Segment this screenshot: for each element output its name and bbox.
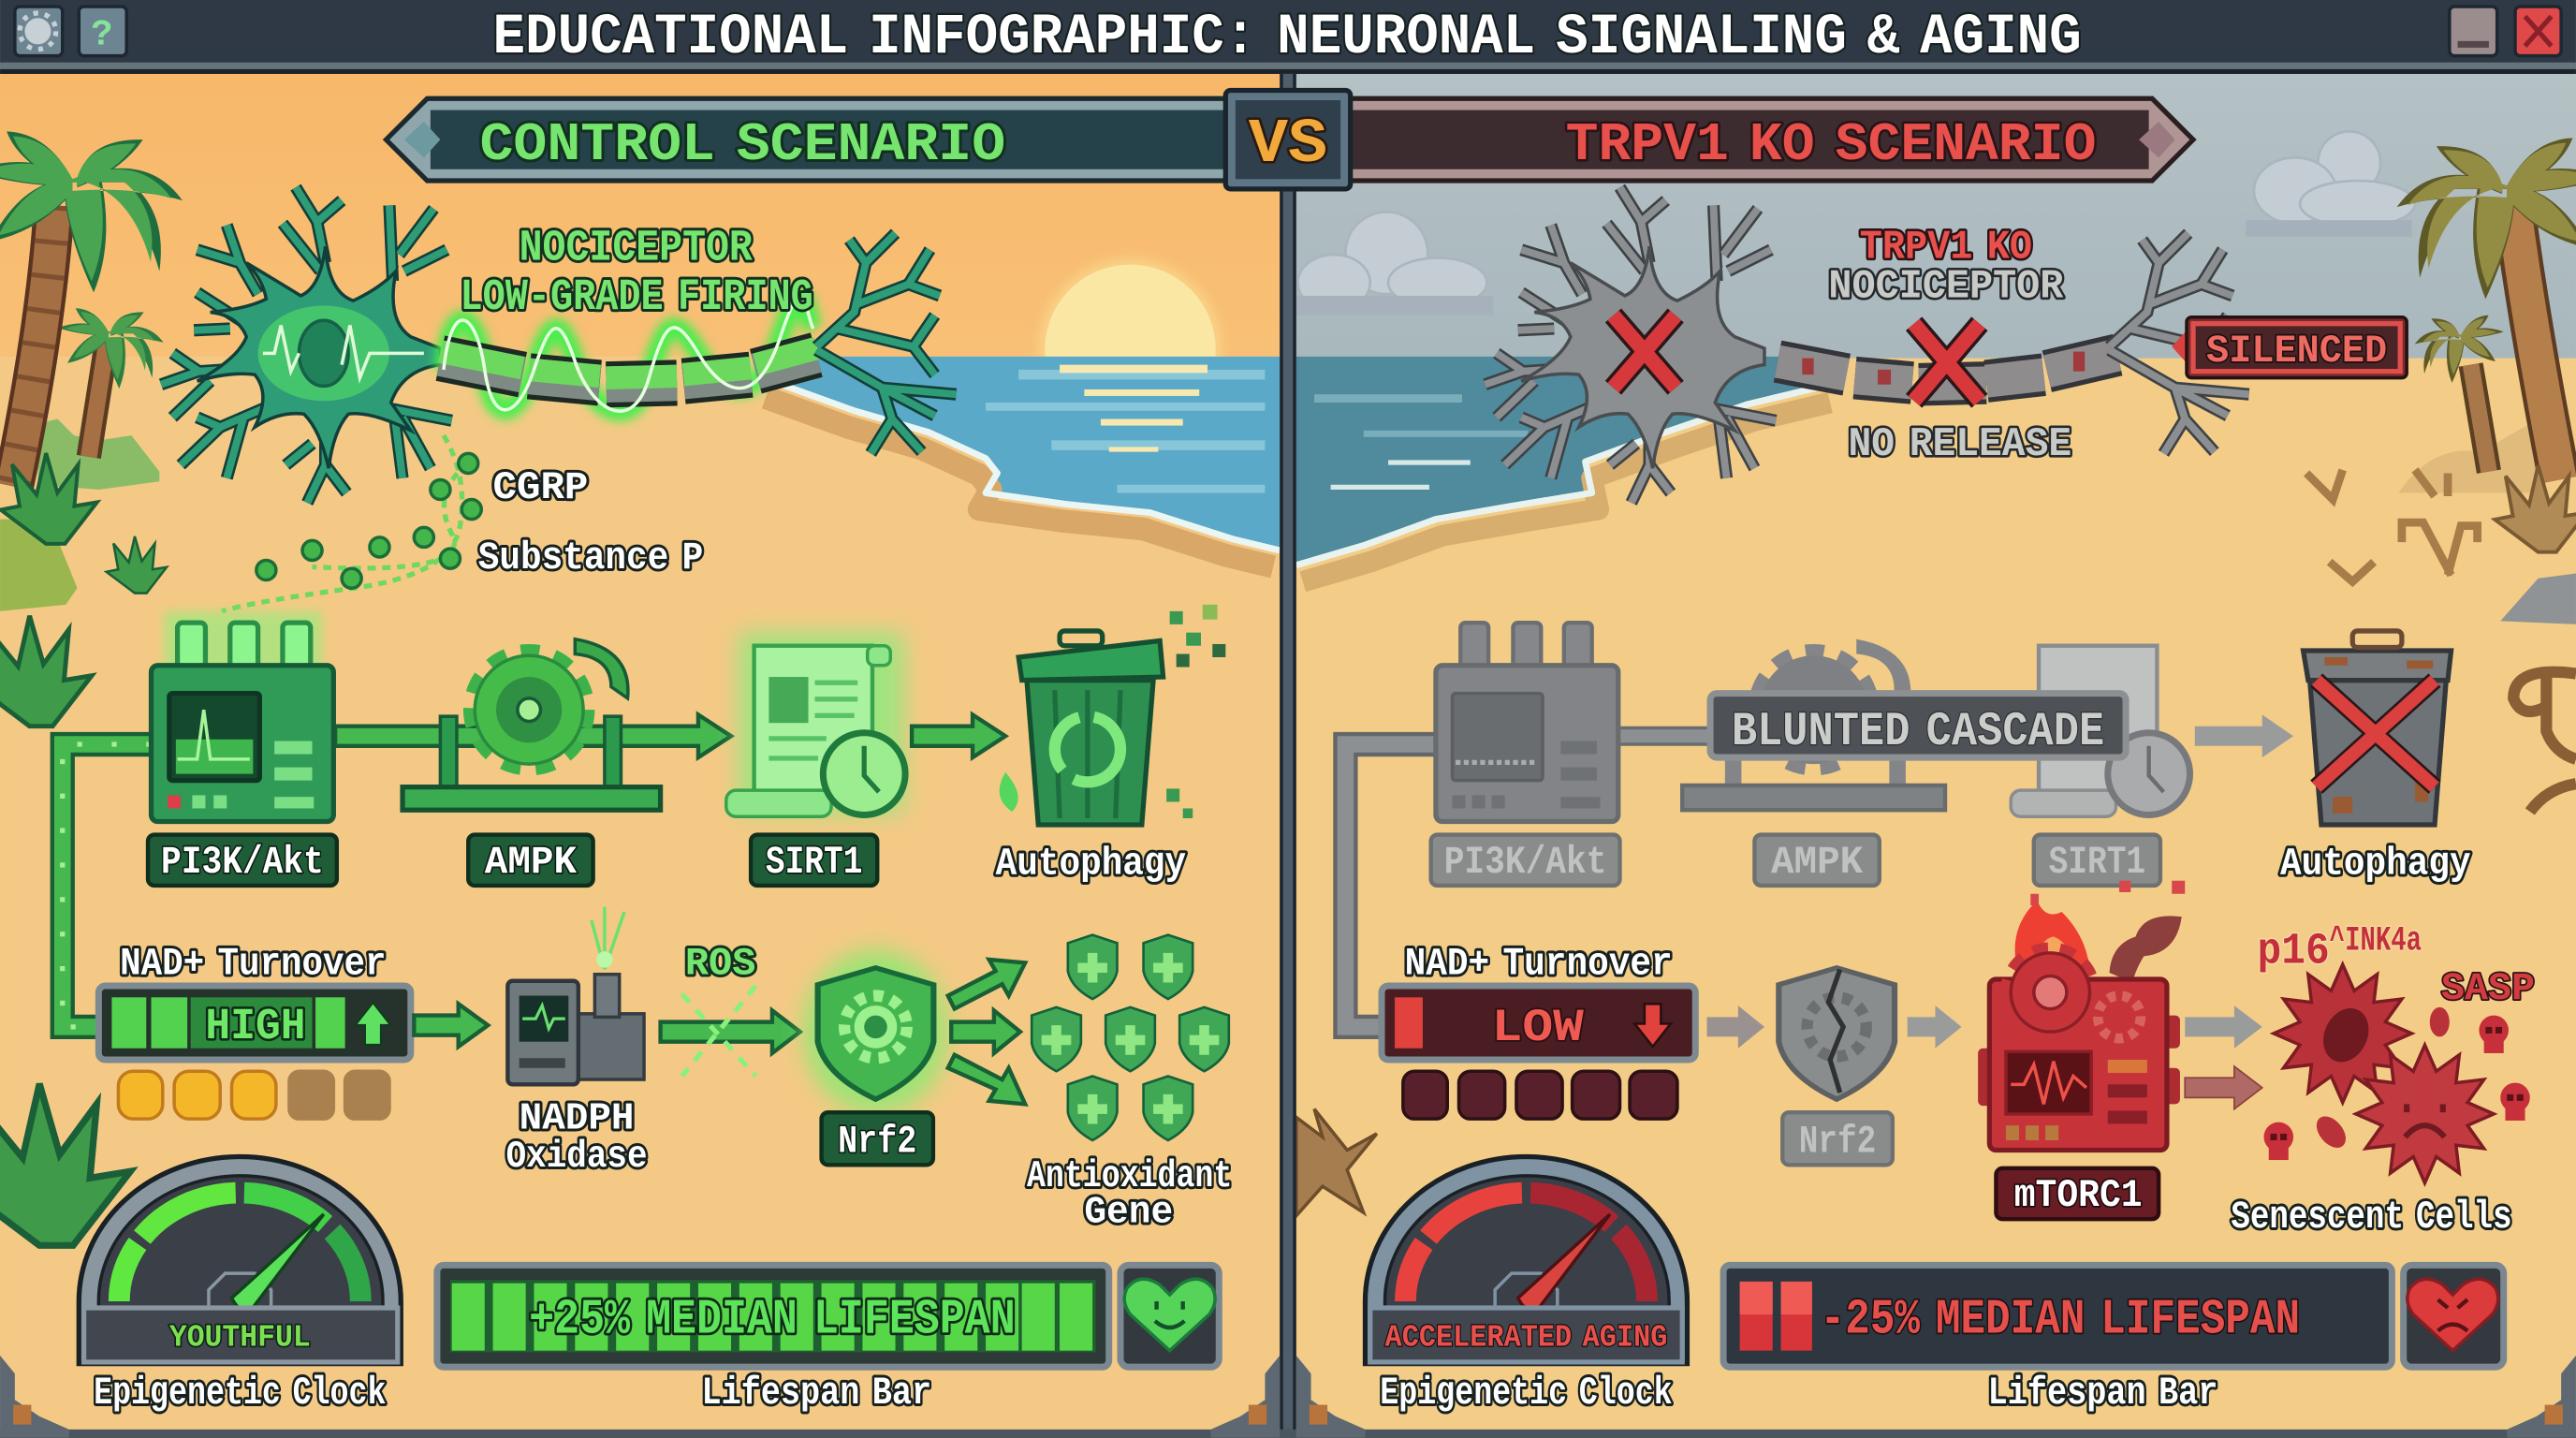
label: NAD+ turnover KO: NAD+ Turnover xyxy=(1405,942,1673,987)
VS badge: VS xyxy=(1249,110,1327,181)
label: senescent cells: Senescent Cells xyxy=(2231,1195,2511,1240)
arrow: NAD+ to Nrf2 blunted xyxy=(1707,1005,1764,1049)
icons: senescent cells and skulls xyxy=(2263,964,2530,1183)
label: mTORC1: mTORC1 xyxy=(2014,1173,2143,1218)
arrow: ROS to Nrf2 xyxy=(661,986,800,1077)
heading banner: control scenario xyxy=(386,98,1229,181)
arrows: mTORC1 to senescent cells xyxy=(2185,1005,2262,1109)
icon: red X on soma xyxy=(1613,315,1676,388)
machine: AMPK greyed xyxy=(1682,639,1945,810)
palm trees and plants: control side xyxy=(0,131,183,1245)
coins: high NAD+ xyxy=(118,1071,389,1119)
machine: PI3K/Akt xyxy=(152,611,333,822)
label: epigenetic clock KO: Epigenetic Clock xyxy=(1380,1371,1673,1416)
arrows: Nrf2 to antioxidant genes xyxy=(948,960,1025,1104)
label: NAD+ turnover control: NAD+ Turnover xyxy=(120,942,386,987)
axon xyxy=(440,298,816,411)
meter: NAD+ low xyxy=(1382,986,1695,1060)
machine: NADPH oxidase xyxy=(507,907,644,1084)
label: p16 INK4a: ^INK4a xyxy=(2330,921,2422,961)
machine: AMPK gear xyxy=(402,639,661,810)
label: TRPV1 KO nociceptor xyxy=(1828,225,2064,311)
title: EDUCATIONAL INFOGRAPHIC: NEURONAL SIGNALING & AGING xyxy=(493,6,2082,70)
window frame bottom corners xyxy=(0,1356,2576,1438)
label: p16 INK4a xyxy=(2257,921,2422,976)
title bar xyxy=(0,0,2576,74)
coins: low NAD+ xyxy=(1403,1071,1677,1119)
gauge: epigenetic clock youthful xyxy=(79,1157,401,1364)
heading text: TRPV1 KO SCENARIO xyxy=(1566,115,2096,176)
label: antioxidant gene: Gene xyxy=(1084,1192,1173,1235)
banner: blunted cascade: BLUNTED CASCADE xyxy=(1732,706,2104,759)
arrow: PI3K to AMPK to SIRT1 xyxy=(335,714,731,757)
label: SIRT1 greyed: SIRT1 xyxy=(2049,840,2145,885)
heading text: CONTROL SCENARIO xyxy=(480,115,1005,176)
label: AMPK greyed: AMPK xyxy=(1771,840,1864,885)
arrow: NAD+ to NADPH oxidase xyxy=(414,1004,488,1047)
meter: NAD+ high xyxy=(98,986,411,1060)
label: NADPH oxidase: Oxidase xyxy=(506,1136,648,1179)
background: control beach panel xyxy=(0,74,1280,1438)
arrow: SIRT1 to autophagy blunted xyxy=(2195,714,2293,757)
label: nociceptor low-grade firing: NOCICEPTOR xyxy=(520,224,753,273)
control nociceptor neuron xyxy=(161,187,956,503)
icon: minimize button xyxy=(2450,7,2497,56)
label: lifespan bar KO: Lifespan Bar xyxy=(1988,1371,2217,1416)
label: CGRP: CGRP xyxy=(493,465,588,510)
label: antioxidant gene xyxy=(1027,1155,1232,1235)
axon xyxy=(1778,352,2117,385)
icon: healthy heart xyxy=(1120,1265,1219,1367)
arrow: Nrf2 to mTORC1 xyxy=(1908,1005,1962,1049)
label: SIRT1: SIRT1 xyxy=(766,840,862,885)
icon: settings button xyxy=(15,7,63,56)
label: PI3K/Akt: PI3K/Akt xyxy=(161,840,324,885)
label: Nrf2: Nrf2 xyxy=(838,1119,916,1164)
TRPV1 KO silenced neuron xyxy=(1486,187,2249,503)
bar: plus 25 percent lifespan: +25% MEDIAN LIFESPAN xyxy=(529,1291,1016,1347)
machine: SIRT1 scroll and clock xyxy=(726,633,905,816)
label: no release: NO RELEASE xyxy=(1848,421,2071,468)
machine: mTORC1 overheating xyxy=(1978,881,2185,1151)
icon: help button: ? xyxy=(91,14,112,55)
gauge: epigenetic clock youthful: YOUTHFUL xyxy=(169,1320,311,1356)
label: nociceptor low-grade firing: LOW-GRADE FIRING xyxy=(460,273,813,323)
icon: cracked Nrf2 shield xyxy=(1778,968,1895,1099)
label: TRPV1 KO nociceptor: TRPV1 KO xyxy=(1860,225,2032,271)
machine: PI3K/Akt silenced xyxy=(1436,623,1618,822)
label: Autophagy: Autophagy xyxy=(996,842,1186,887)
gauge: epigenetic clock accelerated aging xyxy=(1365,1157,1687,1364)
label: NADPH oxidase: NADPH xyxy=(520,1098,634,1141)
label: Autophagy KO: Autophagy xyxy=(2280,842,2471,887)
cloud: left xyxy=(1296,212,1493,315)
label: p16 INK4a: p16 xyxy=(2257,927,2330,976)
gauge: epigenetic clock accelerated aging: ACCELERATED AGING xyxy=(1385,1320,1667,1356)
label: AMPK xyxy=(468,835,593,886)
central divider xyxy=(1280,74,1296,1438)
label: epigenetic clock: Epigenetic Clock xyxy=(94,1371,386,1416)
label: AMPK greyed xyxy=(1754,835,1880,886)
label: NADPH oxidase xyxy=(506,1098,648,1179)
bar: plus 25 percent lifespan xyxy=(437,1265,1109,1367)
palm trees and dry plants: TRPV1 KO side xyxy=(1296,138,2576,1216)
arrow: blunted line from PI3K xyxy=(1618,727,1717,744)
badge: silenced xyxy=(2172,317,2407,378)
icons: antioxidant gene shields xyxy=(1032,935,1229,1140)
icon: Nrf2 shield xyxy=(803,949,948,1114)
label: lifespan bar: Lifespan Bar xyxy=(701,1371,931,1416)
icon: red X on axon xyxy=(1914,324,1980,401)
arrow: SIRT1 to autophagy xyxy=(912,714,1005,757)
label: antioxidant gene: Antioxidant xyxy=(1027,1155,1232,1198)
icon: close button xyxy=(2515,7,2561,56)
machine: SIRT1 greyed xyxy=(2011,646,2190,816)
bar: minus 25 percent lifespan: -25% MEDIAN LIFESPAN xyxy=(1821,1291,2300,1347)
label: Nrf2 greyed: Nrf2 xyxy=(1799,1119,1876,1164)
background: TRPV1 KO beach panel xyxy=(1296,74,2576,1438)
icon: red X on soma fill xyxy=(1613,315,1676,388)
control pathway: pipe from PI3K to NAD+ xyxy=(63,744,152,1027)
cloud: right xyxy=(2246,131,2415,237)
icon: autophagy recycling bin xyxy=(1000,605,1225,825)
icon: broken bin xyxy=(2304,631,2452,825)
label: PI3K/Akt greyed: PI3K/Akt xyxy=(1444,840,1606,885)
bar: minus 25 percent lifespan xyxy=(1723,1265,2392,1367)
neuropeptide dots xyxy=(222,435,481,611)
meter: NAD+ low: LOW xyxy=(1492,1002,1584,1054)
label: SASP: SASP xyxy=(2441,966,2535,1011)
icon: angry heart xyxy=(2404,1265,2504,1367)
meter: NAD+ high: HIGH xyxy=(205,1003,305,1052)
badge: silenced: SILENCED xyxy=(2206,329,2387,374)
label: ROS: ROS xyxy=(685,942,755,987)
label: nociceptor low-grade firing xyxy=(460,224,813,323)
label: Substance P: Substance P xyxy=(478,536,703,580)
heading banner: TRPV1 KO scenario xyxy=(1347,98,2193,181)
KO pathway: pipe from PI3K to NAD+ xyxy=(1345,744,1436,1027)
label: TRPV1 KO nociceptor: NOCICEPTOR xyxy=(1828,264,2064,311)
icon: help button xyxy=(79,7,126,56)
VS badge xyxy=(1225,91,1351,189)
label: AMPK: AMPK xyxy=(485,840,578,885)
